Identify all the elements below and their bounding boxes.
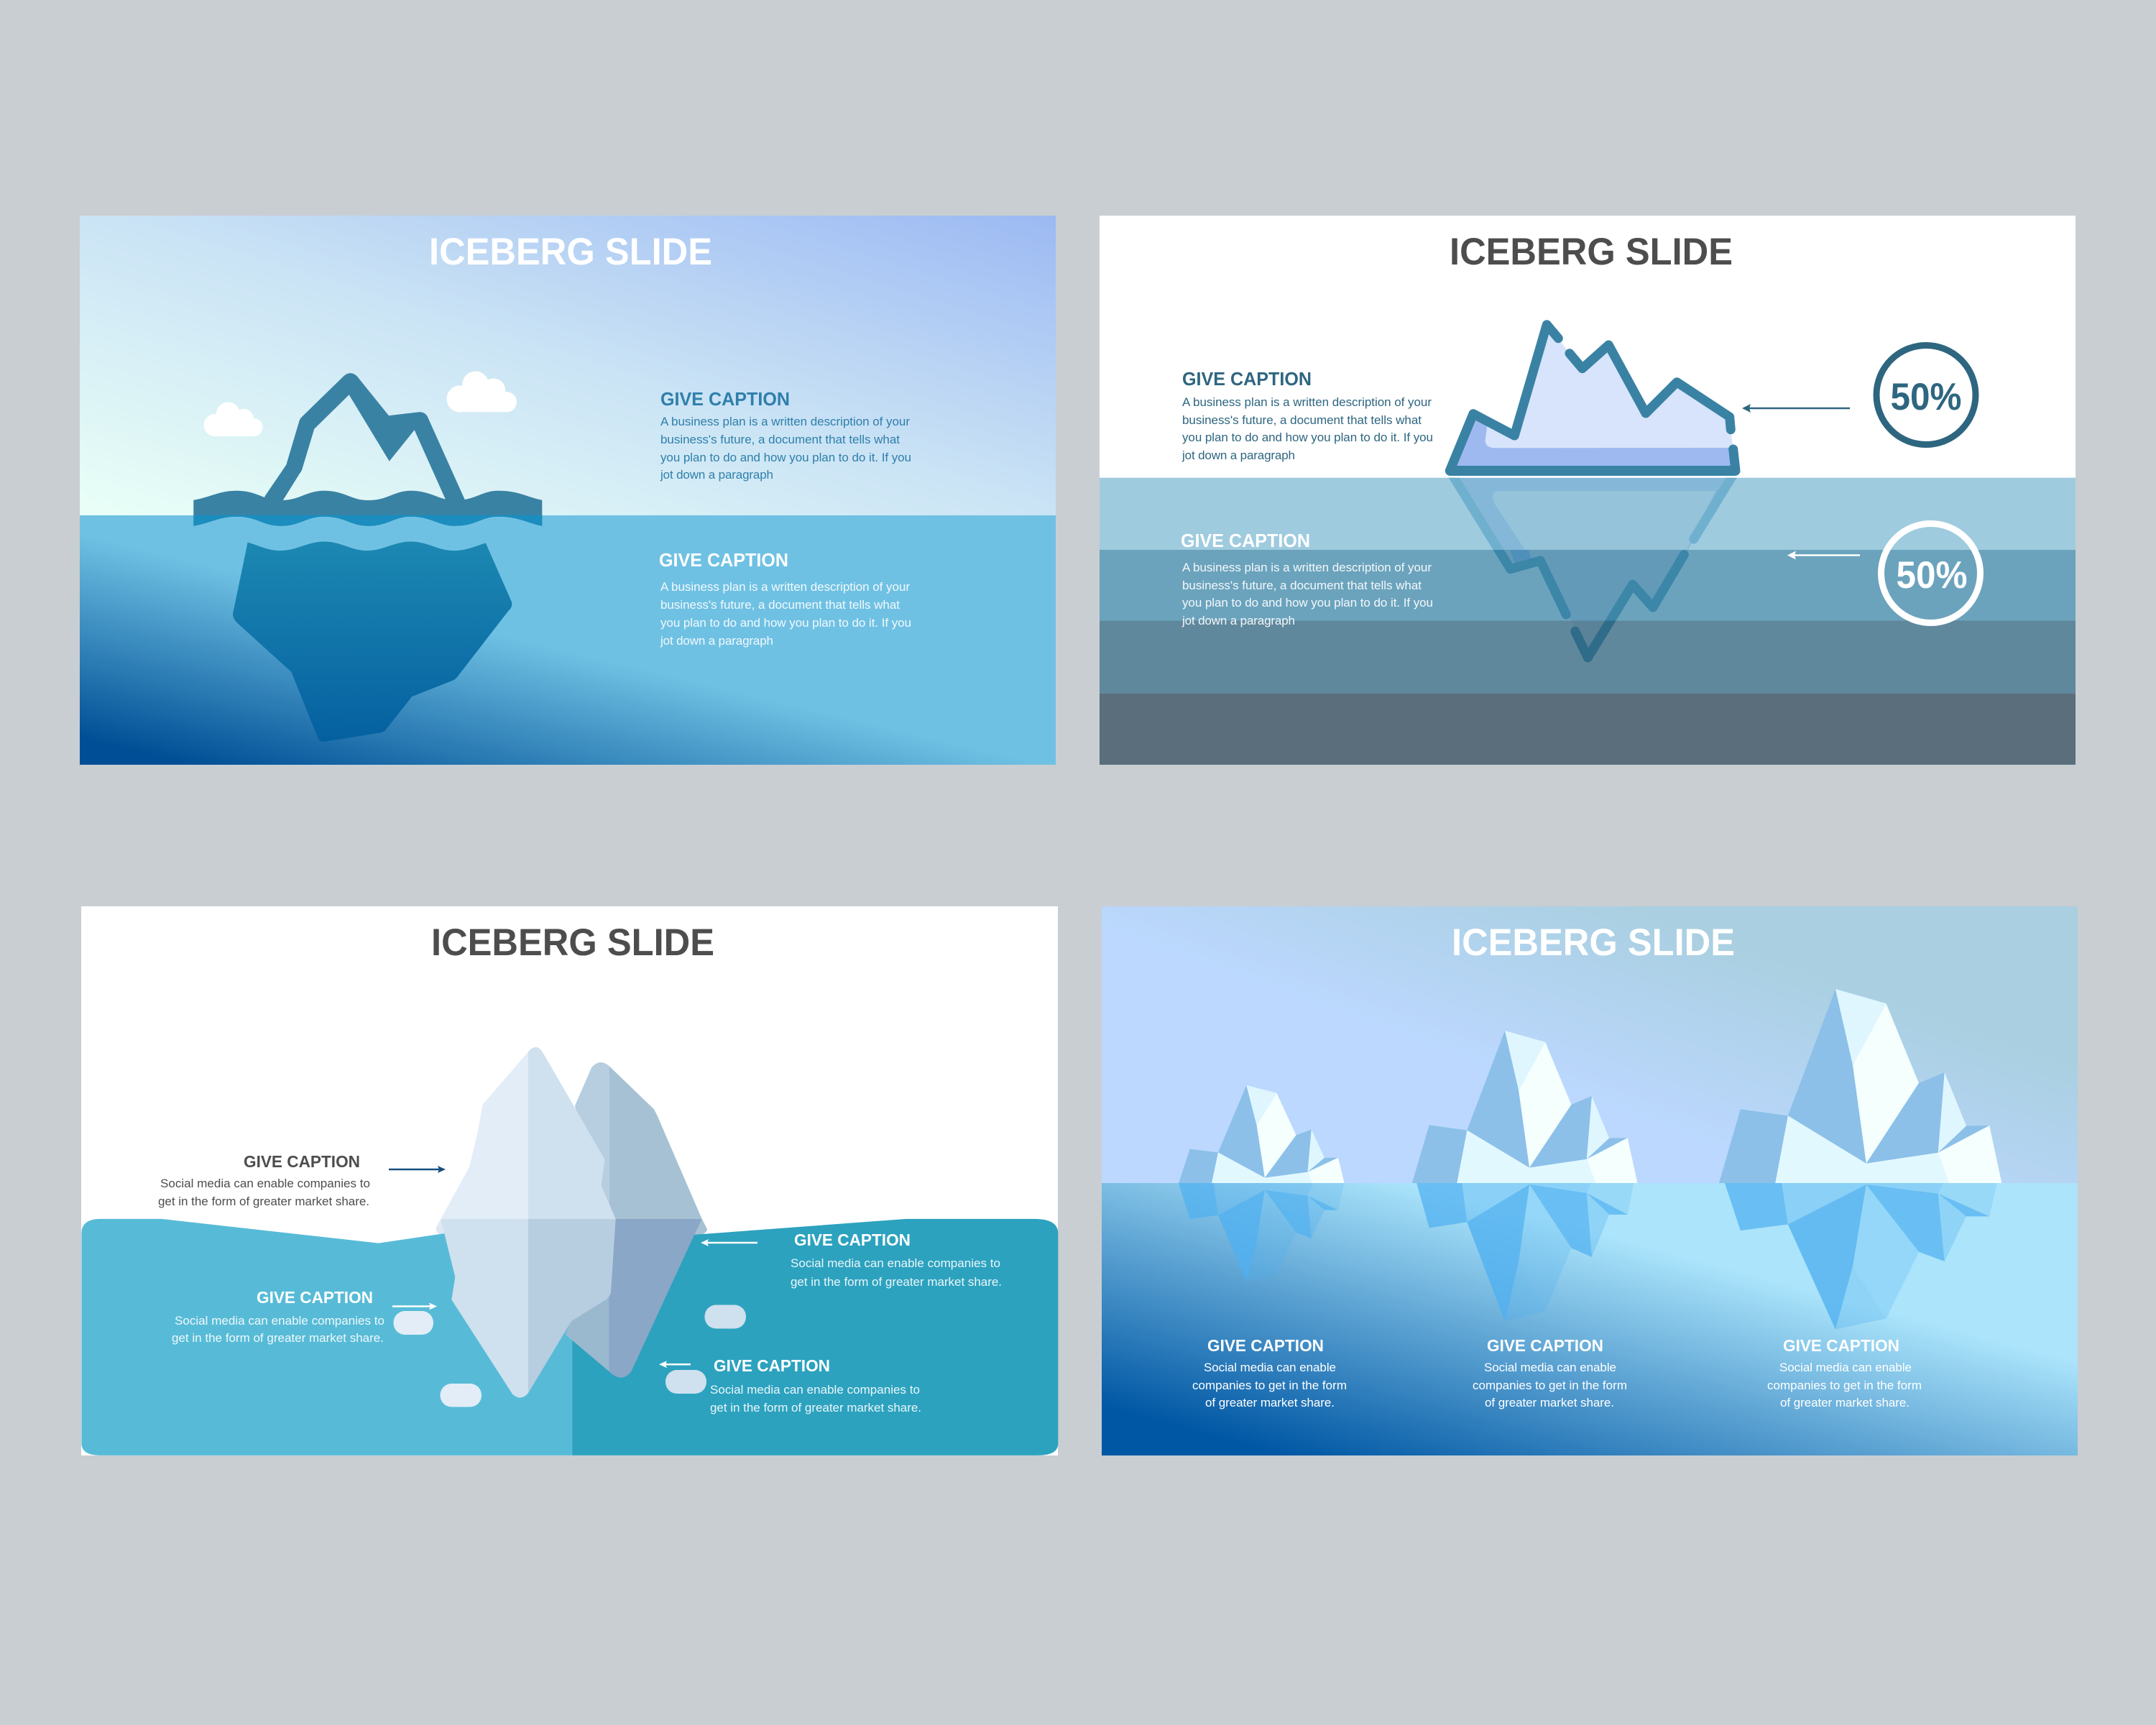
iceberg peak outline	[264, 373, 465, 507]
arrow: right upper	[701, 1239, 757, 1246]
waterline bar	[1450, 466, 1735, 476]
callout: upper 50 percent	[1876, 345, 1976, 444]
caption left	[1192, 1336, 1347, 1409]
water background	[80, 515, 1056, 765]
wave band above water	[193, 491, 542, 526]
caption lower: GIVE CAPTION	[1181, 531, 1310, 551]
caption middle	[1473, 1336, 1627, 1409]
white background	[1100, 216, 2076, 765]
sky background	[80, 216, 1056, 515]
caption bottom left: GIVE CAPTION	[257, 1288, 373, 1307]
arrow: to lower iceberg	[1787, 551, 1860, 559]
caption upper: GIVE CAPTION	[1182, 369, 1312, 390]
caption lower: jot down a paragraph	[660, 634, 773, 648]
reflection outline upper	[1449, 477, 1737, 550]
caption left: companies to get in the form	[1192, 1379, 1347, 1392]
caption upper: A business plan is a written description of your	[1182, 395, 1432, 409]
caption bottom left: get in the form of greater market share.	[172, 1331, 384, 1345]
panel: slide 1 gradient iceberg	[80, 216, 1056, 765]
caption upper: jot down a paragraph	[1181, 448, 1295, 462]
caption right: GIVE CAPTION	[1783, 1336, 1899, 1355]
depth band 1	[1100, 478, 2076, 550]
small iceberg reflection	[1178, 1180, 1345, 1282]
back peak upper left	[575, 1062, 616, 1219]
caption right: Social media can enable	[1779, 1361, 1912, 1374]
ice chunk bottom left	[440, 1384, 482, 1407]
caption top left: Social media can enable companies to	[160, 1177, 370, 1190]
back peak lower left	[566, 1290, 609, 1371]
arrow: right lower	[659, 1361, 691, 1368]
submerged fill middle	[1502, 550, 1688, 621]
ice chunk right	[704, 1305, 746, 1328]
title: ICEBERG SLIDE	[431, 921, 714, 964]
caption upper	[1181, 369, 1433, 462]
submerged iceberg body	[233, 542, 512, 742]
depth band 2	[1100, 550, 2076, 621]
submerged fill upper	[1460, 478, 1726, 550]
title: ICEBERG SLIDE	[1450, 231, 1733, 273]
sky background	[1102, 906, 2078, 1183]
icon: iceberg silhouette	[193, 373, 542, 742]
caption lower: A business plan is a written description of your	[660, 580, 910, 594]
callout: lower 50 percent	[1881, 523, 1981, 622]
front peak lower left	[441, 1219, 528, 1398]
front peak lower right	[528, 1219, 616, 1393]
caption upper: you plan to do and how you plan to do it. If you	[660, 451, 911, 464]
ice fill	[1450, 325, 1736, 471]
iceberg outline above water	[1450, 325, 1736, 471]
caption lower: jot down a paragraph	[1181, 614, 1295, 627]
arrow: left underwater	[392, 1302, 437, 1310]
panel: slide 2 outlined iceberg	[1100, 216, 2076, 765]
ice chunk left	[394, 1311, 433, 1335]
caption middle: GIVE CAPTION	[1487, 1336, 1603, 1355]
caption upper: jot down a paragraph	[660, 468, 773, 482]
caption top left: GIVE CAPTION	[244, 1152, 360, 1171]
caption top right: Social media can enable companies to	[791, 1256, 1000, 1270]
caption upper: A business plan is a written description of your	[660, 415, 910, 428]
caption left: of greater market share.	[1205, 1396, 1335, 1409]
large iceberg reflection	[1720, 1169, 2000, 1330]
title: ICEBERG SLIDE	[429, 231, 712, 273]
caption bottom right: get in the form of greater market share.	[710, 1401, 921, 1414]
illustration: icebergs	[1174, 989, 2005, 1330]
depth band 3	[1100, 621, 2076, 694]
panel: slide 4 three icebergs	[1102, 906, 2078, 1455]
water background	[1102, 1183, 2078, 1455]
caption bottom left: Social media can enable companies to	[175, 1314, 384, 1328]
caption upper: business's future, a document that tells what	[1182, 413, 1422, 427]
arrow: to upper iceberg	[1742, 404, 1850, 413]
caption top right: get in the form of greater market share.	[791, 1275, 1002, 1289]
caption lower: business's future, a document that tells what	[660, 598, 900, 612]
reflection outline deep	[1570, 621, 1616, 663]
reflection outline middle	[1493, 550, 1689, 621]
front peak upper left	[441, 1052, 528, 1219]
small iceberg	[1179, 1085, 1344, 1183]
icon: right cloud	[447, 371, 517, 413]
caption top left	[158, 1152, 370, 1208]
icon: outlined iceberg	[1450, 325, 1736, 658]
ice chunk lower right	[665, 1370, 706, 1394]
front peak upper right	[528, 1047, 616, 1219]
caption lower: you plan to do and how you plan to do it. If you	[1182, 596, 1433, 610]
caption right: companies to get in the form	[1767, 1379, 1922, 1392]
panel: slide 3 double iceberg	[81, 906, 1058, 1455]
caption lower: A business plan is a written description of your	[1182, 561, 1432, 574]
caption upper	[660, 390, 911, 482]
medium iceberg	[1409, 1031, 1640, 1195]
caption middle: Social media can enable	[1484, 1361, 1616, 1374]
iceberg waterline bulge left	[436, 1219, 453, 1236]
submerged darker patch	[1510, 550, 1532, 568]
caption upper: GIVE CAPTION	[660, 390, 790, 410]
caption bottom right: Social media can enable companies to	[710, 1383, 920, 1397]
arrow: dark	[389, 1166, 446, 1173]
caption left: GIVE CAPTION	[1207, 1336, 1324, 1355]
white background	[81, 906, 1058, 1455]
caption right	[1767, 1336, 1922, 1409]
caption top right: GIVE CAPTION	[794, 1230, 911, 1249]
submerged fill deep	[1572, 621, 1610, 658]
icon: left cloud	[204, 402, 263, 436]
depth band 4	[1100, 694, 2076, 765]
callout: lower 50 percent: 50%	[1896, 554, 1968, 597]
caption lower	[659, 551, 911, 648]
water right	[572, 1219, 1058, 1455]
callout: upper 50 percent: 50%	[1890, 376, 1962, 418]
caption lower	[1181, 531, 1433, 627]
medium iceberg reflection	[1413, 1169, 1636, 1321]
caption lower: GIVE CAPTION	[659, 551, 788, 571]
caption bottom left	[172, 1288, 384, 1345]
caption top right	[791, 1230, 1002, 1289]
back peak lower right	[609, 1219, 702, 1378]
wave band below waterline	[193, 515, 542, 526]
ice shadow	[1450, 415, 1734, 471]
water left	[81, 1219, 585, 1455]
caption lower: you plan to do and how you plan to do it. If you	[660, 616, 911, 630]
caption middle: of greater market share.	[1485, 1396, 1614, 1409]
double iceberg	[441, 1047, 702, 1398]
iceberg waterline bulge right	[683, 1219, 707, 1236]
caption top left: get in the form of greater market share.	[158, 1195, 369, 1208]
submerged highlight	[1493, 491, 1715, 550]
caption upper: business's future, a document that tells what	[660, 433, 900, 446]
caption middle: companies to get in the form	[1473, 1379, 1627, 1392]
caption upper: you plan to do and how you plan to do it. If you	[1182, 431, 1433, 444]
caption left: Social media can enable	[1204, 1361, 1336, 1374]
large iceberg	[1715, 989, 2005, 1197]
caption right: of greater market share.	[1780, 1396, 1909, 1409]
caption lower: business's future, a document that tells what	[1182, 579, 1422, 592]
caption bottom right: GIVE CAPTION	[714, 1356, 830, 1375]
caption bottom right	[710, 1356, 921, 1414]
back peak upper right	[609, 1066, 702, 1219]
title: ICEBERG SLIDE	[1452, 921, 1735, 964]
